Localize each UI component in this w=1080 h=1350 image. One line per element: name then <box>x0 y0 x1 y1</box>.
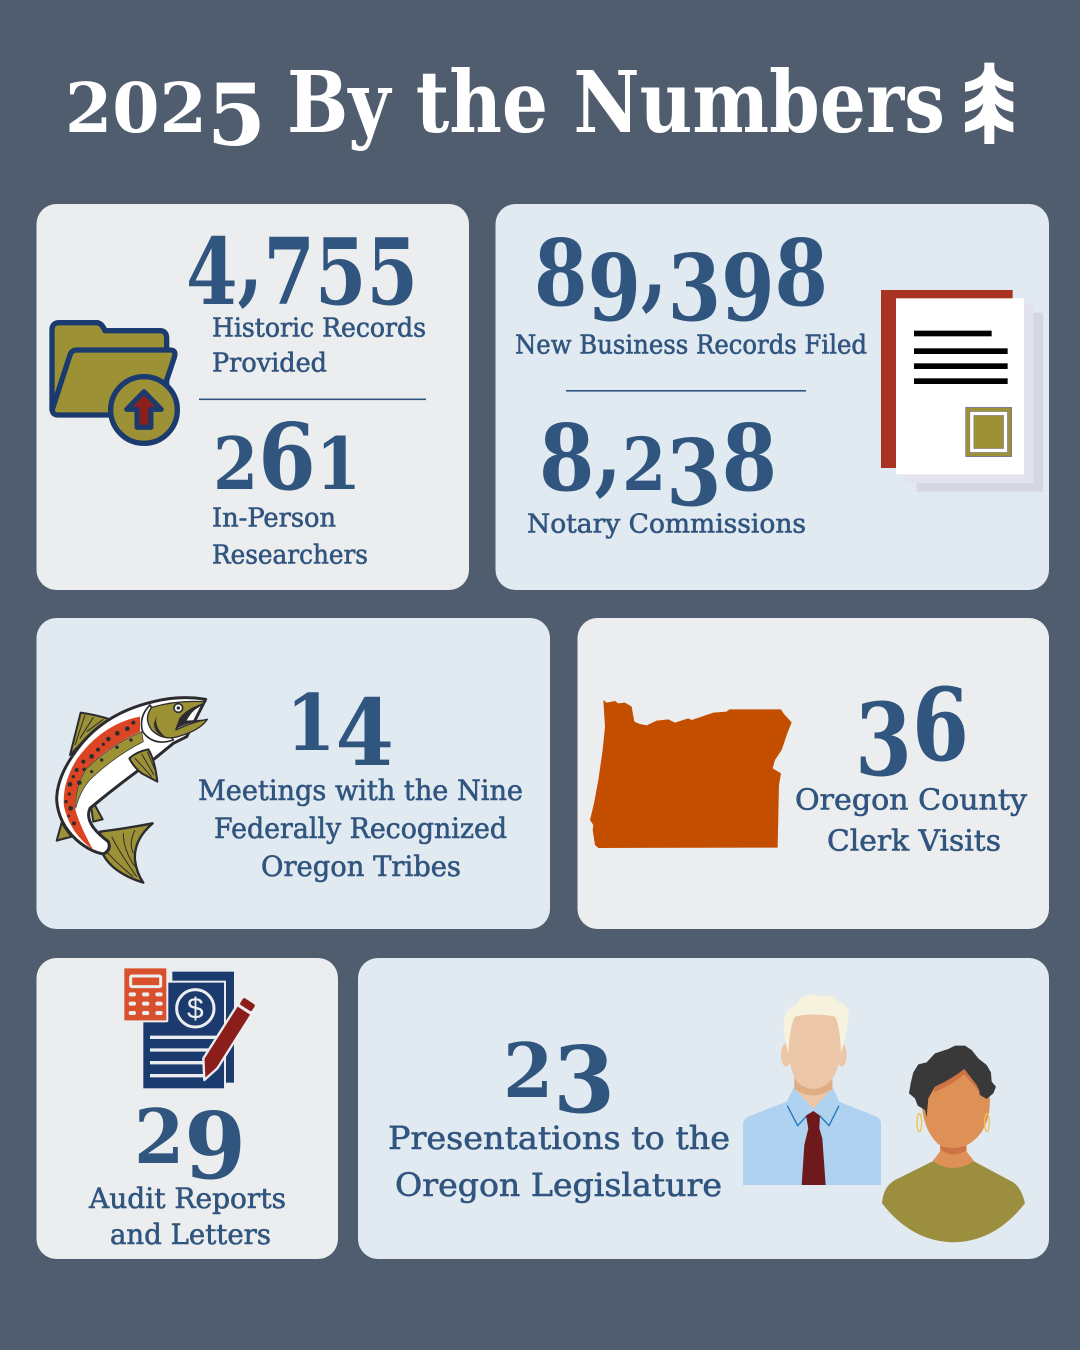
stat: 23: 2 <box>503 1027 553 1115</box>
icon: audit document <box>123 967 256 1089</box>
panel: county clerk visits <box>578 618 1049 929</box>
stat: 8,238: 2 <box>622 422 666 508</box>
label: new business records filed: New Business Records Filed <box>515 330 867 360</box>
label: presentations to the legislature: Oregon Legislature <box>395 1166 722 1204</box>
stat: 89,398: 8 <box>775 219 828 327</box>
stat: 29: 9 <box>184 1092 246 1200</box>
label: historic records provided <box>212 314 426 378</box>
label: meetings with tribes: Federally Recognized <box>214 812 507 845</box>
icon: two people <box>743 994 1025 1242</box>
stat: 4,755: 4 <box>186 218 250 326</box>
label: presentations to the legislature: Presentations to the <box>388 1119 730 1157</box>
label: in-person researchers <box>212 504 368 570</box>
title: By the Numbers <box>287 53 945 153</box>
label: meetings with tribes: Meetings with the Nine <box>198 774 523 807</box>
stat: 8,238: 8 <box>722 404 777 512</box>
label: audit reports and letters <box>88 1182 286 1251</box>
stat: 14: 1 <box>286 678 336 769</box>
stat: 8,238: 3 <box>666 419 722 527</box>
icon: tree <box>965 63 1013 144</box>
panel: business records <box>496 204 1049 590</box>
stat: 29: 2 <box>134 1093 184 1181</box>
stat: 4,755: 755 <box>263 218 418 326</box>
woman <box>882 1046 1025 1242</box>
stat: 36: 3 <box>855 681 912 799</box>
label: presentations to the legislature <box>388 1119 730 1204</box>
stat: 23: 3 <box>553 1026 615 1134</box>
label: in-person researchers: Researchers <box>212 540 368 570</box>
stat: 4,755: , <box>238 208 263 316</box>
stat: 8,238: , <box>594 398 622 506</box>
title: 202 <box>65 69 207 149</box>
stat: 14: 4 <box>336 679 394 787</box>
label: historic records provided: Historic Records <box>212 314 426 344</box>
panel: historic records <box>36 204 469 590</box>
title: 5 <box>207 66 266 166</box>
icon: trout <box>57 698 207 883</box>
label: historic records provided: Provided <box>212 348 327 378</box>
title <box>65 53 945 166</box>
icon: folder upload <box>52 323 177 443</box>
label: county clerk visits: Clerk Visits <box>827 824 1001 858</box>
label: county clerk visits <box>795 782 1028 858</box>
stat: 8,238: 8 <box>539 404 603 512</box>
stat: 89,398: 9 <box>587 234 641 342</box>
panel: legislature presentations <box>358 958 1049 1259</box>
label: in-person researchers: In-Person <box>212 504 336 534</box>
panel: audit reports <box>36 958 338 1259</box>
stat: 261: 261 <box>213 403 361 511</box>
label: meetings with tribes: Oregon Tribes <box>261 850 461 883</box>
icon: Oregon map <box>590 700 792 848</box>
stat: 36: 6 <box>912 666 969 784</box>
stat: 89,398: , <box>641 213 668 321</box>
label: notary commissions: Notary Commissions <box>527 510 806 540</box>
stat: 89,398: 39 <box>668 234 775 342</box>
label: audit reports and letters: Audit Reports <box>88 1182 286 1215</box>
panel: tribes <box>36 618 550 929</box>
man <box>743 994 881 1185</box>
icon: documents <box>881 290 1043 492</box>
icon: audit document: $ <box>187 993 204 1026</box>
stat: 89,398: 8 <box>534 219 598 327</box>
label: county clerk visits: Oregon County <box>795 782 1028 816</box>
label: meetings with tribes <box>198 774 523 883</box>
label: audit reports and letters: and Letters <box>110 1218 271 1251</box>
